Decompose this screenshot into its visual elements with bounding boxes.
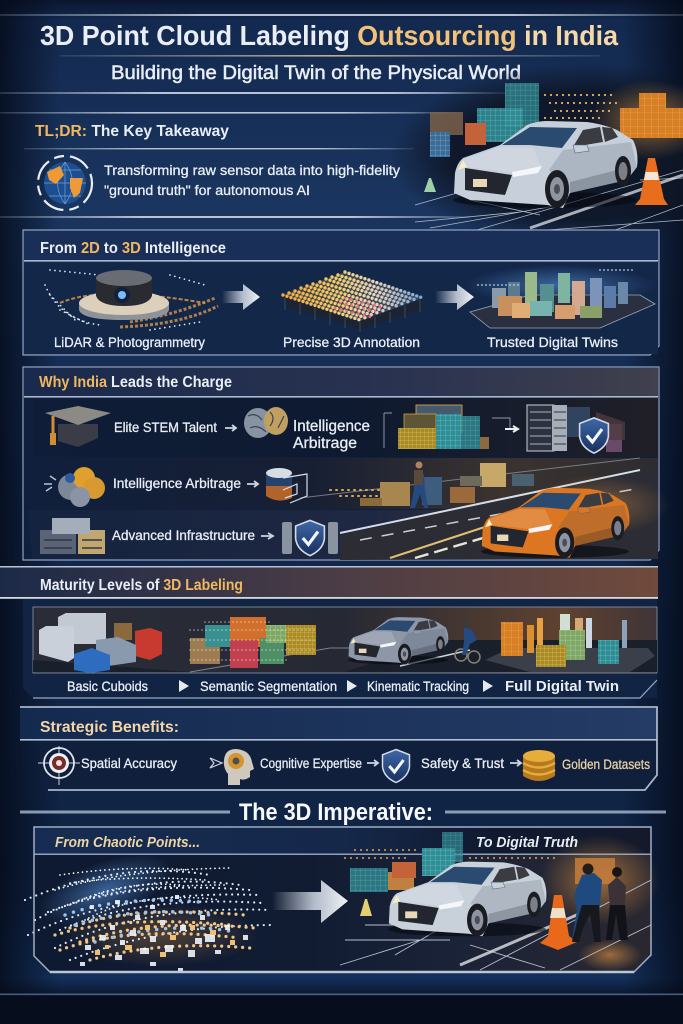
people [572,864,628,942]
small arrow [225,425,236,431]
subtitle: Building the Digital Twin of the Physical World [111,63,521,84]
icon: LiDAR sensor [45,270,218,330]
panel: Strategic Benefits: Safety & Trust [421,755,504,771]
level labels [67,679,619,695]
headings: From Chaotic Points... [55,835,200,851]
row: Advanced Infrastructure: Advanced Infrastructure [112,527,255,543]
small arrow [367,760,378,766]
big arrow [272,880,348,923]
hero scene: car on digital road [390,63,683,247]
icon: globe [38,156,92,210]
icon: traffic cone [635,158,668,205]
divider left [20,810,230,814]
heading: The 3D Imperative: The 3D Imperative: [239,799,433,826]
icon: graduation cap [45,406,111,447]
icon: brain [244,407,288,438]
title: 3D Point Cloud Labeling Outsourcing in India [40,20,618,51]
labels [54,335,618,350]
labels: LiDAR & Photogrammetry [54,335,205,350]
divider right [445,810,666,814]
Intelligence Arbitrage label: Intelligence [293,418,370,435]
chaotic point cloud [25,840,275,971]
section: TL;DR heading: TL;DR: The Key Takeaway [35,123,229,140]
city digital twin [465,265,655,328]
cuboids [39,613,162,673]
TL;DR text: "ground truth" for autonomous AI [104,182,310,198]
cuboid scene [384,405,510,449]
small arrow [505,426,518,432]
icon: white car [388,862,546,936]
level labels: Kinematic Tracking [367,679,469,694]
row: Advanced Infrastructure [28,465,670,560]
level labels: Full Digital Twin [505,679,619,695]
TL;DR text [104,162,400,198]
icon: orange car [481,488,629,558]
row: Intelligence Arbitrage: Intelligence Arbitrage [113,475,241,491]
small arrow [261,533,273,539]
Intelligence Arbitrage label [293,418,370,452]
point cloud grid [283,272,423,332]
row: Intelligence Arbitrage [30,458,658,509]
icon: gold coins [523,750,555,781]
heading: Strategic Benefits: [40,719,179,736]
row: Elite STEM Talent [34,398,658,457]
icon: 3D cylinder [266,468,307,503]
maturity illustration band [33,607,657,673]
icon: server rack [527,405,625,453]
person walking [410,462,428,508]
digital twin city [485,614,655,672]
heading: Maturity Levels of 3D Labeling [40,577,243,594]
cyclist [455,621,480,663]
level labels: Semantic Segmentation [200,679,337,694]
icon: grey car [348,617,448,664]
icon: target [38,746,80,785]
heading: From 2D to 3D Intelligence [40,240,226,257]
icon: brain colored [44,467,105,507]
panel: Why India Leads the Charge [23,367,670,560]
panel: Strategic Benefits: Golden Datasets [562,757,650,772]
bottom rule [0,994,683,995]
panel: Strategic Benefits [20,707,657,790]
TL;DR text: Transforming raw sensor data into high-fidelity [104,162,400,178]
panel: From Chaotic Points to Digital Truth [25,827,660,972]
small arrow [510,760,521,766]
panel: From 2D to 3D Intelligence [23,230,659,355]
header rules [0,14,683,218]
icon: infrastructure boxes [40,518,105,554]
row: Elite STEM Talent: Elite STEM Talent [114,419,217,435]
Intelligence Arbitrage label: Arbitrage [293,435,357,452]
icon: cognitive head [210,749,254,785]
labels: Precise 3D Annotation [283,335,420,350]
icon: shield [580,418,608,453]
level labels: Basic Cuboids [67,679,148,694]
icon: small green cone [424,178,436,192]
small arrow [247,481,258,487]
digital city behind car [340,832,651,971]
icon: shield [382,750,410,782]
heading: Why India Leads the Charge [39,374,232,391]
icon: traffic cone [540,895,577,950]
icon: silver car [453,121,638,208]
panel: Strategic Benefits: Spatial Accuracy [81,755,177,771]
arrow [222,284,260,310]
semantic segmentation cubes [190,617,316,668]
labels: Trusted Digital Twins [487,335,618,350]
icon: shield with pillars [282,520,338,556]
panel: Maturity Levels of 3D Labeling [0,566,658,698]
panel frame [34,827,651,972]
small yellow cone [360,899,372,916]
panel: Strategic Benefits: Cognitive Expertise [260,756,362,771]
panel: From Chaotic Points to Digital Truth: To Digital Truth [476,835,578,851]
arrow [435,284,474,310]
